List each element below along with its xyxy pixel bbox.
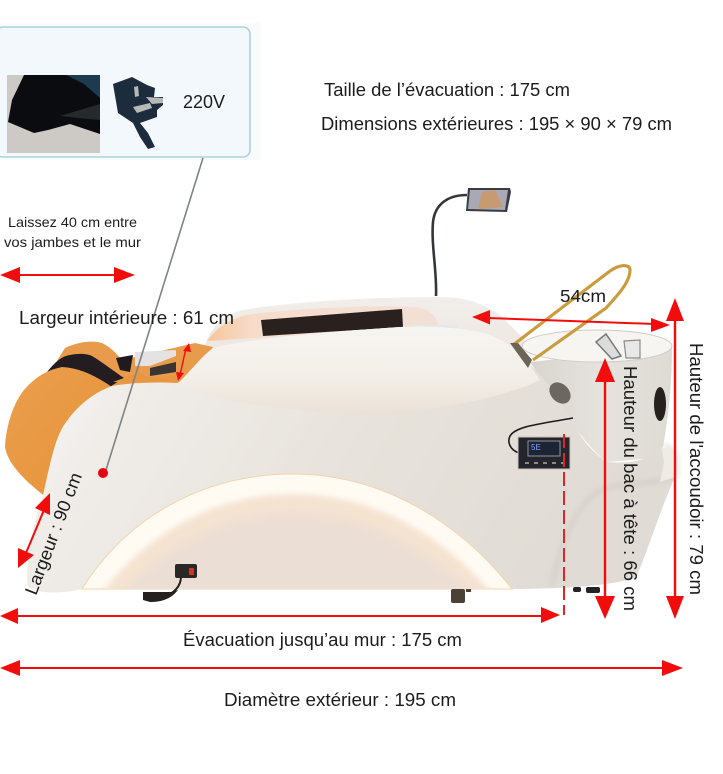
label: voltage: 220V [183, 92, 225, 112]
arrow: outer diameter [0, 660, 683, 676]
label: armrest height: Hauteur de l'accoudoir : 79 cm [686, 343, 706, 595]
upper bulge of body [178, 327, 540, 413]
illustration: shampoo chair [5, 188, 676, 604]
reclined recess [207, 306, 458, 341]
text block: wall clearance note: Laissez 40 cm entre [8, 214, 137, 230]
title: drain size: Taille de l’évacuation : 175 cm [324, 80, 570, 100]
photo: power socket under chair [7, 75, 100, 153]
arrow: drain to wall [0, 607, 560, 624]
white main body [27, 327, 675, 593]
label: 54 cm: 54cm [560, 286, 606, 306]
orange foot cushion [5, 342, 213, 495]
text block: wall clearance note [4, 214, 141, 250]
arrow: inner width [176, 343, 191, 381]
label: outer diameter: Diamètre extérieur : 195 cm [224, 690, 456, 710]
label: basin height: Hauteur du bac à tête : 66 cm [620, 366, 640, 611]
dashed line: drain position [563, 434, 565, 615]
label: drain to wall: Évacuation jusqu’au mur : 175 cm [183, 630, 462, 650]
illuminated arch [81, 474, 513, 590]
power switch [163, 564, 197, 597]
phone holder [433, 188, 511, 296]
panel: power supply inset [0, 23, 261, 160]
icon: power plug [113, 77, 163, 149]
label: width 90 cm: Largeur : 90 cm [21, 470, 86, 597]
text block: wall clearance note: vos jambes et le mur [4, 234, 141, 250]
gold handle [510, 266, 630, 368]
arrow: wall clearance [0, 267, 135, 283]
icon: plug pins [133, 86, 163, 113]
tub collar [552, 446, 676, 585]
basin side knob [545, 378, 575, 408]
feet and wheels [143, 587, 600, 603]
marker: power location [98, 468, 108, 478]
arrow: armrest height [666, 298, 684, 619]
leader line to power inset [106, 158, 203, 470]
title: outer dimensions: Dimensions extérieures : 195 × 90 × 79 cm [321, 114, 672, 134]
upper backrest [205, 297, 525, 370]
arrow: width 90 cm [18, 493, 50, 568]
shower head [596, 334, 640, 359]
arrow: 54 cm [472, 310, 670, 332]
basin [522, 330, 672, 462]
control panel: 5E [531, 443, 541, 452]
label: inner width: Largeur intérieure : 61 cm [19, 308, 234, 328]
arrow: basin height [595, 358, 615, 619]
control panel [509, 418, 573, 469]
drain hole [654, 387, 666, 421]
